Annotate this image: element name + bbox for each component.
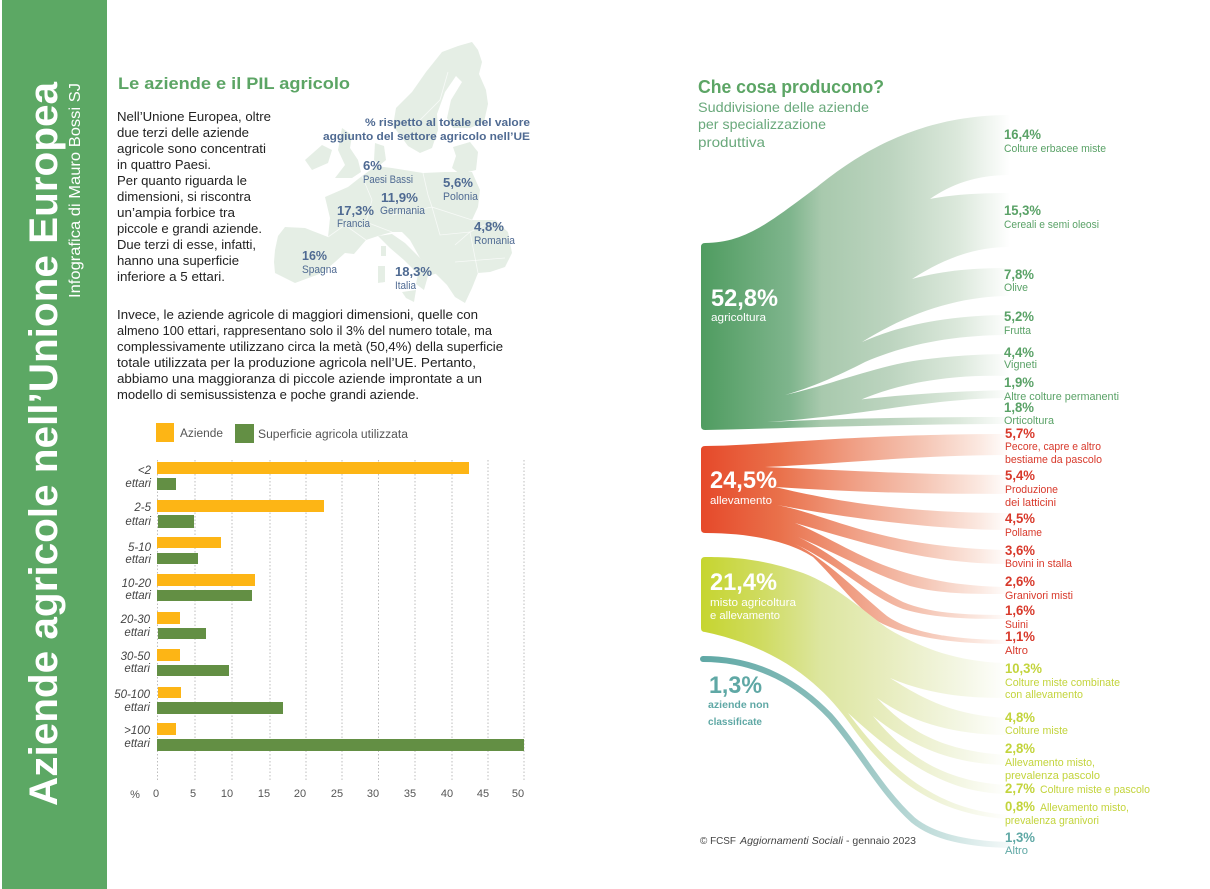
source label: misto: e allevamento (710, 610, 780, 622)
country: Francia: 17,3% (337, 203, 374, 218)
labels: misto breakdown: prevalenza pascolo (1005, 770, 1100, 782)
country: Italia (395, 264, 432, 292)
text block: intro paragraph (117, 110, 271, 284)
bars: 2-5 ettari (157, 500, 324, 528)
country: Francia (337, 203, 374, 230)
chart legend: Superficie agricola utilizzata (258, 429, 409, 441)
x axis labels: 5 (190, 788, 196, 800)
source label: agricoltura: agricoltura (711, 312, 767, 324)
x axis labels: 10 (221, 788, 233, 800)
labels: agricoltura breakdown (1004, 127, 1119, 427)
labels: allevamento breakdown (1005, 426, 1102, 657)
country: Paesi Bassi (363, 158, 413, 186)
labels: misto breakdown (1005, 661, 1150, 827)
bars: 10-20 ettari (157, 574, 255, 601)
source credit: - gennaio 2023 (846, 835, 916, 847)
labels: allevamento breakdown: 1,6% (1005, 603, 1035, 618)
x axis labels: 30 (367, 788, 379, 800)
category labels: ettari (124, 663, 150, 675)
text block: intro paragraph: inferiore a 5 ettari. (117, 270, 225, 284)
labels: agricoltura breakdown: Cereali e semi oleosi (1004, 219, 1099, 231)
country: Spagna: Spagna (302, 264, 338, 276)
map title: aggiunto del settore agricolo nell’UE (323, 131, 530, 143)
source label: agricoltura: 52,8% (711, 285, 778, 312)
country: Polonia: Polonia (443, 191, 479, 203)
text block: intro paragraph: Due terzi di esse, infatti, (117, 238, 256, 252)
labels: agricoltura breakdown: 5,2% (1004, 309, 1034, 324)
map labels: share of agricultural value added (302, 117, 530, 292)
x axis labels: 45 (477, 788, 489, 800)
labels: allevamento breakdown: Suini (1005, 619, 1028, 631)
labels: agricoltura breakdown: Altre colture permanenti (1004, 391, 1119, 403)
country: Romania: 4,8% (474, 219, 504, 234)
chart legend (156, 423, 409, 443)
country: Romania (474, 219, 516, 247)
source credit (700, 835, 916, 847)
labels: misto breakdown: prevalenza granivori (1005, 815, 1099, 827)
labels: agricoltura breakdown: Olive (1004, 282, 1028, 294)
labels: misto breakdown: Colture miste e pascolo (1040, 784, 1150, 796)
heading: le aziende e il PIL agricolo: Le aziende e il PIL agricolo (118, 74, 350, 93)
panel: green title band (2, 0, 107, 889)
source credit: © FCSF (700, 835, 736, 847)
text block: second paragraph: abbiamo una maggioranza di piccole aziende improntate a un (117, 372, 482, 386)
country: Germania: 11,9% (381, 190, 418, 205)
country: Romania: Romania (474, 235, 516, 247)
text block: intro paragraph: un’ampia forbice tra (117, 206, 235, 220)
sankey flow: agricoltura (701, 115, 1010, 430)
text block: intro paragraph: in quattro Paesi. (117, 158, 211, 172)
source label: misto: 21,4% (710, 569, 777, 596)
labels: allevamento breakdown: Altro (1005, 645, 1028, 657)
source label: misto: misto agricoltura (710, 597, 797, 609)
map of Europe (274, 42, 512, 303)
labels: misto breakdown: Colture miste combinate (1005, 677, 1120, 689)
country: Paesi Bassi: Paesi Bassi (363, 174, 413, 186)
labels: misto breakdown: 2,8% (1005, 741, 1035, 756)
labels: agricoltura breakdown: Vigneti (1004, 359, 1037, 371)
labels: allevamento breakdown: Produzione (1005, 484, 1058, 496)
category labels: >100 (124, 725, 151, 737)
x axis labels: 50 (512, 788, 524, 800)
labels: allevamento breakdown: dei latticini (1005, 497, 1056, 509)
subheading: produttiva (698, 134, 765, 150)
text block: intro paragraph: hanno una superficie (117, 254, 239, 268)
category labels: ettari (124, 627, 150, 639)
bars: <2 ettari (157, 462, 469, 490)
sankey flow: non classificate (703, 659, 1008, 845)
bars: >100 ettari (157, 723, 524, 751)
category labels: <2 (138, 465, 152, 477)
source label: allevamento (710, 467, 777, 507)
x axis labels: 15 (258, 788, 270, 800)
text block: intro paragraph: due terzi delle aziende (117, 126, 249, 140)
heading: che cosa producono (698, 77, 884, 150)
labels: misto breakdown: Allevamento misto, (1005, 757, 1095, 769)
category labels: ettari (125, 554, 151, 566)
text block: intro paragraph: agricole sono concentrati (117, 142, 266, 156)
subheading: per specializzazione (698, 116, 826, 132)
country: Polonia (443, 175, 479, 203)
text block: second paragraph: complessivamente utilizzano circa la metà (50,4%) della superficie (117, 340, 503, 354)
labels: misto breakdown: 0,8% (1005, 799, 1035, 814)
labels: allevamento breakdown: bestiame da pascolo (1005, 454, 1102, 466)
labels: allevamento breakdown: Granivori misti (1005, 590, 1073, 602)
labels: misto breakdown: 10,3% (1005, 661, 1042, 676)
labels: agricoltura breakdown: 1,9% (1004, 375, 1034, 390)
labels: agricoltura breakdown: Frutta (1004, 325, 1032, 337)
country: Spagna: 16% (302, 248, 327, 263)
sankey flow: allevamento (701, 434, 1010, 644)
x axis labels: % (130, 789, 140, 801)
source label: non classificate: aziende non (708, 699, 769, 711)
source label: non classificate: classificate (708, 716, 762, 728)
labels: misto breakdown: con allevamento (1005, 689, 1083, 701)
byline: Infografica di Mauro Bossi SJ (67, 83, 84, 298)
country: Francia: Francia (337, 218, 371, 230)
labels: agricoltura breakdown: 16,4% (1004, 127, 1041, 142)
category labels: 50-100 (114, 689, 151, 701)
labels: agricoltura breakdown: 1,8% (1004, 400, 1034, 415)
x axis labels (130, 788, 524, 801)
text block: second paragraph: almeno 100 ettari, rappresentano solo il 3% del numero totale, ma (117, 324, 492, 338)
labels: agricoltura breakdown: 15,3% (1004, 203, 1041, 218)
heading: che cosa producono: Che cosa producono? (698, 77, 884, 97)
country: Italia: 18,3% (395, 264, 432, 279)
label: altro non classificate: Altro (1005, 845, 1028, 857)
country: Polonia: 5,6% (443, 175, 473, 190)
x axis labels: 35 (404, 788, 416, 800)
source label: non classificate (708, 672, 769, 728)
x axis labels: 20 (294, 788, 306, 800)
country: Italia: Italia (395, 280, 417, 292)
labels: agricoltura breakdown: 4,4% (1004, 345, 1034, 360)
labels: allevamento breakdown: Pecore, capre e altro (1005, 441, 1101, 453)
text block: intro paragraph: piccole e grandi aziende. (117, 222, 262, 236)
country: Germania: Germania (380, 205, 426, 217)
labels: allevamento breakdown: 1,1% (1005, 629, 1035, 644)
labels: agricoltura breakdown: Colture erbacee miste (1004, 143, 1106, 155)
category labels: ettari (125, 516, 151, 528)
category labels: 5-10 (128, 542, 152, 554)
labels: misto breakdown: Colture miste (1005, 725, 1068, 737)
text block: intro paragraph: dimensioni, si riscontra (117, 190, 251, 204)
x axis labels: 40 (441, 788, 453, 800)
map title (323, 117, 530, 143)
text block: second paragraph (117, 308, 503, 402)
map title: % rispetto al totale del valore (365, 117, 530, 129)
labels: allevamento breakdown: 5,4% (1005, 468, 1035, 483)
labels: allevamento breakdown: 2,6% (1005, 574, 1035, 589)
bar chart: farms and utilised agricultural area by size (114, 460, 524, 801)
sankey flow: misto (701, 557, 1010, 819)
labels: allevamento breakdown: Bovini in stalla (1005, 558, 1073, 570)
bars: 5-10 ettari (157, 537, 221, 564)
chart legend: Aziende (180, 428, 223, 440)
text block: second paragraph: totale utilizzata per la produzione agricola nell’UE. Pertanto, (117, 356, 476, 370)
source credit: Aggiornamenti Sociali (739, 835, 844, 847)
category labels (114, 465, 152, 750)
labels: allevamento breakdown: 3,6% (1005, 543, 1035, 558)
text block: intro paragraph: Nell’Unione Europea, oltre (117, 110, 271, 124)
category labels: ettari (125, 590, 151, 602)
label: altro non classificate (1005, 830, 1035, 857)
category labels: 2-5 (133, 502, 152, 514)
labels: allevamento breakdown: 5,7% (1005, 426, 1035, 441)
category labels: ettari (124, 738, 150, 750)
category labels: 10-20 (122, 578, 152, 590)
x axis labels: 25 (331, 788, 343, 800)
category labels: 20-30 (120, 614, 151, 626)
country: Spagna (302, 248, 338, 276)
source label: allevamento: allevamento (710, 495, 772, 507)
text block: second paragraph: modello di semisussistenza e poche grandi aziende. (117, 388, 419, 402)
source label: misto (710, 569, 797, 622)
category labels: ettari (124, 702, 150, 714)
labels: allevamento breakdown: 4,5% (1005, 511, 1035, 526)
labels: agricoltura breakdown: Orticoltura (1004, 415, 1055, 427)
text block: second paragraph: Invece, le aziende agricole di maggiori dimensioni, quelle con (117, 308, 478, 322)
country: Germania (380, 190, 426, 217)
labels: misto breakdown: Allevamento misto, (1040, 802, 1129, 814)
labels: allevamento breakdown: Pollame (1005, 527, 1042, 539)
source label: allevamento: 24,5% (710, 467, 777, 494)
bars: 20-30 ettari (157, 612, 206, 639)
subheading (698, 99, 869, 150)
source label: non classificate: 1,3% (709, 672, 762, 699)
bars: 30-50 ettari (157, 649, 229, 676)
label: altro non classificate: 1,3% (1005, 830, 1035, 845)
category labels: 30-50 (121, 651, 151, 663)
labels: agricoltura breakdown: 7,8% (1004, 267, 1034, 282)
text block: intro paragraph: Per quanto riguarda le (117, 174, 247, 188)
category labels: ettari (125, 478, 151, 490)
bars: 50-100 ettari (157, 687, 283, 714)
country: Paesi Bassi: 6% (363, 158, 382, 173)
subheading: Suddivisione delle aziende (698, 99, 869, 115)
source label: agricoltura (711, 285, 778, 324)
labels: misto breakdown: 4,8% (1005, 710, 1035, 725)
labels: misto breakdown: 2,7% (1005, 781, 1035, 796)
x axis labels: 0 (153, 788, 159, 800)
title: Aziende agricole nell’Unione Europea (22, 81, 66, 806)
